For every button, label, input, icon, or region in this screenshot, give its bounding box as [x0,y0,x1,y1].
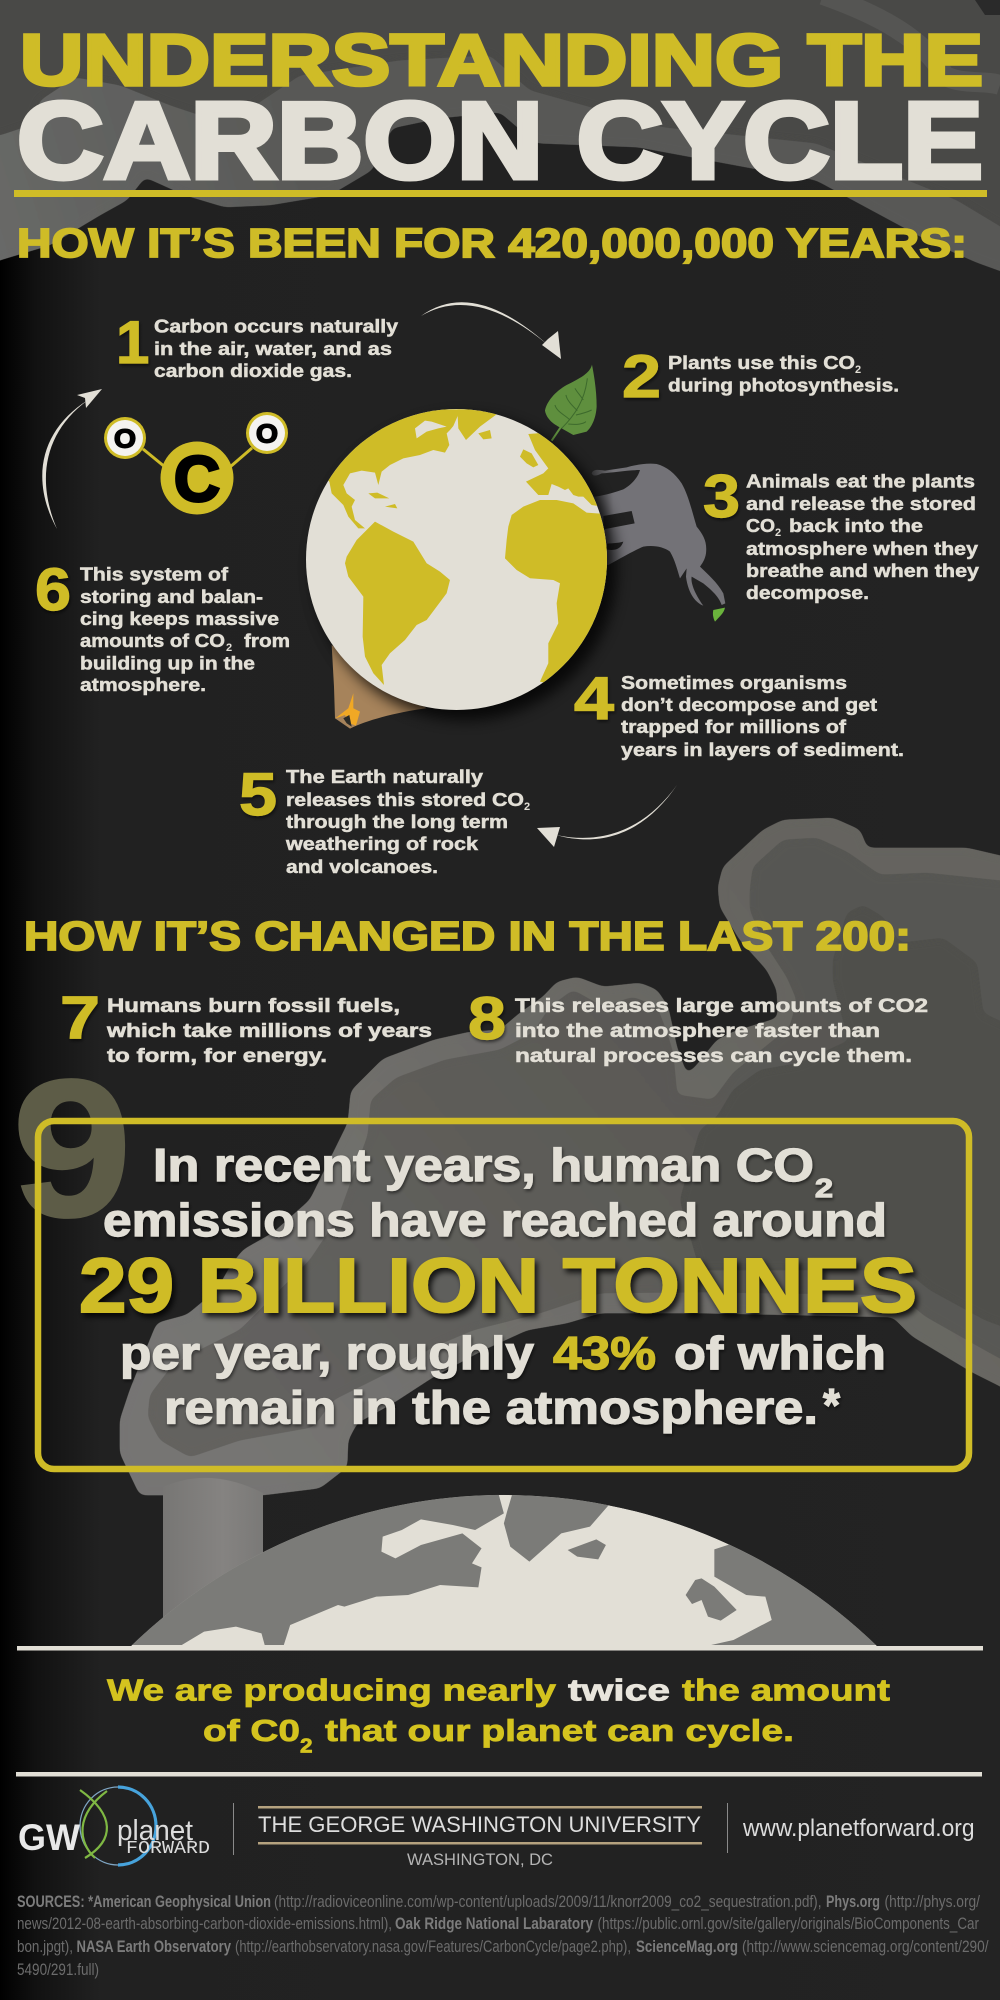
title: CARBON CYCLE [17,80,983,202]
step 3: Animals eat the plants [746,471,975,492]
callout box: emissions have reached around [103,1194,887,1246]
logo: GW Planet Forward [18,1787,210,1865]
divider [16,1772,982,1776]
icon: leaf [545,365,597,441]
step 5: weathering of rock [285,833,479,854]
step 5: 5 [239,761,277,828]
step 7: which take millions of years [106,1020,432,1042]
sources: news/2012-08-earth-absorbing-carbon-dioxide-emissions.html), [17,1914,392,1933]
conclusion text: 2 [300,1736,312,1758]
step 1: Carbon occurs naturally [154,316,399,336]
step 6: This system of [80,564,229,584]
logo: The George Washington University: THE GEORGE WASHINGTON UNIVERSITY [258,1812,701,1837]
divider [17,1646,983,1650]
step 7: 7 [60,984,100,1051]
step 6 [35,556,290,695]
step 1: carbon dioxide gas. [154,360,352,381]
step 2: Plants use this CO [668,352,855,373]
step 4: don’t decompose and get [621,694,877,715]
callout box: of which [674,1327,886,1379]
globe [306,409,623,720]
step 8: into the atmosphere faster than [515,1020,880,1042]
separator [727,1803,728,1853]
sources: (http://earthobservatory.nasa.gov/Features/CarbonCycle/page2.php), [235,1937,631,1956]
callout box: In recent years, human CO [153,1139,814,1191]
icon: CO2 molecule [104,412,288,515]
step 4: Sometimes organisms [621,672,847,693]
step 5: through the long term [286,811,508,832]
step 3: 2 [775,527,781,539]
step 1 [116,309,399,381]
step 6: 2 [226,642,232,654]
logo: GW Planet Forward: planet [117,1815,193,1847]
conclusion text: the amount [682,1672,890,1708]
step 5: 2 [524,801,530,813]
step 7: Humans burn fossil fuels, [107,995,400,1017]
callout box: 43% [553,1327,656,1379]
conclusion text [107,1672,890,1758]
icon: CO2 molecule: O [256,418,278,448]
arrow: step 6 to 1 [42,389,102,529]
heading: how it's been: HOW IT’S BEEN FOR 420,000,000 YEARS: [17,220,967,266]
step 4: trapped for millions of [621,716,847,737]
sources [17,1892,989,1979]
step 2: during photosynthesis. [668,374,899,396]
step 2: 2 [855,364,861,376]
title [14,21,987,202]
logo: The George Washington University: WASHINGTON, DC [407,1850,553,1869]
chimney [163,1478,263,1646]
sources: (http://phys.org/ [884,1892,980,1911]
sources: Phys.org [826,1892,880,1911]
icon: CO2 molecule: C [174,443,220,515]
step 5: and volcanoes. [286,856,438,877]
sources: (http://radioviceonline.com/wp-content/uploads/2009/11/knorr2009_co2_sequestration.pdf), [274,1892,822,1911]
step 1: in the air, water, and as [154,338,392,359]
step 7 [60,984,432,1067]
step 5 [239,761,530,877]
arrow: step 1 to 2 [421,302,561,359]
step 8: 8 [468,985,506,1052]
step 8 [468,985,928,1067]
logo: GW Planet Forward: GW [18,1817,80,1858]
step 4: 4 [574,665,615,732]
website: www.planetforward.org [742,1815,974,1842]
step 2 [622,343,899,410]
step 6: cing keeps massive [80,608,279,629]
step 6: amounts of CO [80,630,225,651]
conclusion text: We are producing nearly [107,1672,557,1708]
step 7: to form, for energy. [107,1045,327,1067]
step 1: 1 [116,309,149,376]
step 3: back into the [789,515,923,536]
callout box: remain in the atmosphere. [164,1382,818,1434]
step 3: decompose. [746,582,869,603]
icon: volcano with lightning [332,645,427,729]
conclusion text: that our planet can cycle. [325,1713,794,1748]
grey globe at bottom [131,1490,906,1646]
logo: The George Washington University [258,1806,702,1869]
callout box: 2 [815,1173,833,1203]
step 6: from [244,630,290,651]
title: UNDERSTANDING THE [20,21,983,101]
step 6: building up in the [80,652,255,674]
step 4: years in layers of sediment. [621,739,904,760]
step 9 numeral: 9 [12,1039,132,1258]
icon: CO2 molecule: O [114,424,136,454]
sources: 5490/291.full) [17,1960,99,1979]
step 3: 3 [703,463,740,530]
smoke cloud: top [0,0,1000,285]
conclusion text: of C0 [203,1713,300,1748]
callout box [38,1121,969,1469]
heading: how it's changed: HOW IT’S CHANGED IN THE LAST 200: [24,913,911,959]
callout box: * [823,1379,840,1431]
step 3 [703,463,980,603]
sources: SOURCES: *American Geophysical Union [17,1892,271,1911]
sources: NASA Earth Observatory [76,1937,231,1956]
step 3: CO [746,515,775,536]
step 6: storing and balan- [80,586,263,607]
step 6: 6 [35,556,71,623]
step 5: The Earth naturally [286,766,484,787]
step 8: natural processes can cycle them. [515,1045,912,1067]
step 3: and release the stored [746,493,976,514]
step 2: 2 [622,343,661,410]
smoke plume from chimney [120,818,1000,1495]
step 6: atmosphere. [80,674,206,695]
step 3: breathe and when they [746,560,980,581]
sources: Oak Ridge National Labaratory [395,1914,593,1933]
logo: GW Planet Forward: FORWARD [126,1839,210,1859]
step 3: atmosphere when they [746,538,979,559]
step 8: This releases large amounts of CO2 [515,995,928,1017]
step 4 [574,665,904,760]
step 5: releases this stored CO [286,789,524,810]
callout box: per year, roughly [120,1327,534,1379]
arrow: step 4 to 5 [537,785,677,847]
conclusion text: twice [568,1672,670,1708]
icon: elephant [573,464,725,622]
sources: ScienceMag.org [636,1937,738,1956]
big number: 29 BILLION TONNES [79,1243,917,1329]
sources: bon.jpgt), [17,1937,73,1956]
separator [233,1803,234,1855]
